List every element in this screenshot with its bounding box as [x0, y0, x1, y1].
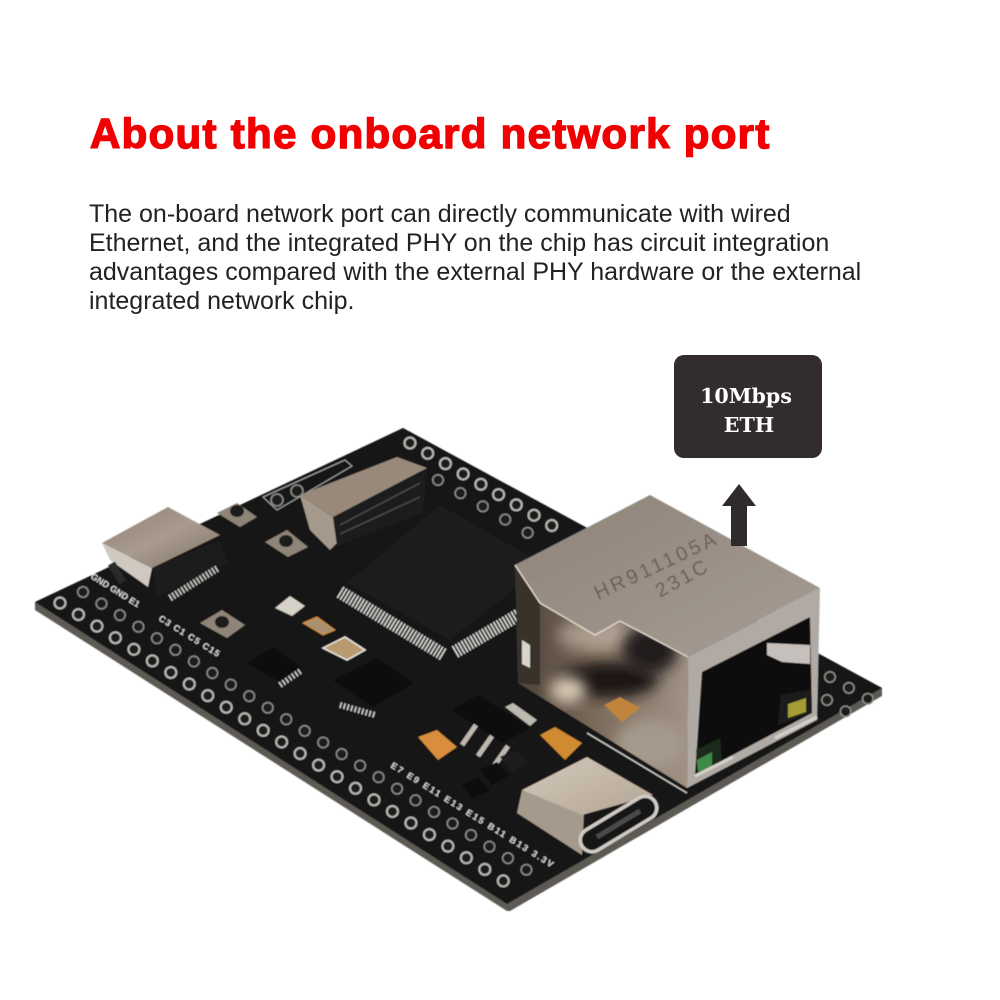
- circuit board: [35, 428, 882, 911]
- lower edge hole rows: [60, 592, 530, 882]
- buttons: [200, 503, 308, 638]
- left USB-C port: [102, 507, 228, 598]
- description text: advantages compared with the external PHY hardware or the external: [89, 258, 861, 286]
- description text: [89, 200, 861, 315]
- product illustration: [34, 427, 883, 912]
- right edge holes: [827, 677, 870, 714]
- title: About the onboard network port: [90, 110, 771, 157]
- small components: [247, 596, 582, 798]
- main chip: [340, 505, 545, 655]
- arrow pointing up: [722, 484, 756, 546]
- speed label box: [674, 355, 822, 458]
- upper edge hole rows: [410, 443, 568, 540]
- silkscreen labels: GND GND E1: [89, 571, 142, 609]
- speed label box: 10Mbps: [700, 384, 792, 408]
- speed label box: ETH: [724, 413, 774, 437]
- silkscreen labels: E7 E9 E11 E13 E15 B11 B13 3.3V: [389, 760, 555, 869]
- bottom USB-C port: [517, 733, 687, 855]
- description text: integrated network chip.: [89, 287, 354, 315]
- jack marking: HR911105A: [591, 529, 720, 605]
- silkscreen labels: [89, 571, 555, 869]
- description text: The on-board network port can directly communicate with wired: [89, 200, 791, 228]
- description text: Ethernet, and the integrated PHY on the chip has circuit integration: [89, 229, 829, 257]
- jack marking: 231C: [652, 556, 711, 602]
- top card slot: [300, 457, 427, 550]
- RJ45 network jack: [515, 495, 820, 788]
- silkscreen labels: C3 C1 C5 C15: [157, 613, 222, 659]
